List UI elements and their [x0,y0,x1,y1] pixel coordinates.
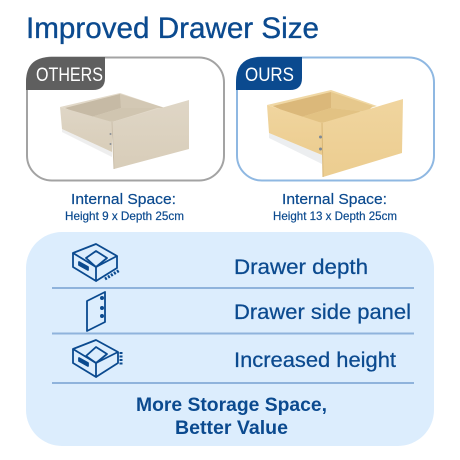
title: Improved Drawer Size [26,12,319,45]
badge: others [26,57,105,90]
card outline: others [27,58,224,180]
callout [136,395,327,439]
panel: others [26,57,224,180]
label: increased height: Increased height [234,349,396,372]
icon: side panel [87,292,105,331]
label: drawer depth: Drawer depth [234,256,368,279]
caption: ours: Height 13 x Depth 25cm [273,209,397,223]
icon: drawer depth [73,244,120,281]
badge: ours: OURS [245,65,294,86]
icon: increased height [73,340,121,377]
callout: More Storage Space, [136,395,327,416]
caption: others [65,191,184,223]
caption: ours: Internal Space: [282,191,387,208]
caption: others: Internal Space: [71,191,176,208]
label: drawer side panel: Drawer side panel [234,301,411,324]
card outline: ours [237,58,434,180]
caption: ours [273,191,397,223]
badge: others: OTHERS [36,65,103,86]
badge: ours [236,57,302,90]
drawer: others [60,93,189,169]
drawer: ours [267,90,403,177]
panel: features [26,232,434,446]
panel: ours [236,57,434,180]
caption: others: Height 9 x Depth 25cm [65,209,184,223]
callout: Better Value [175,418,288,439]
